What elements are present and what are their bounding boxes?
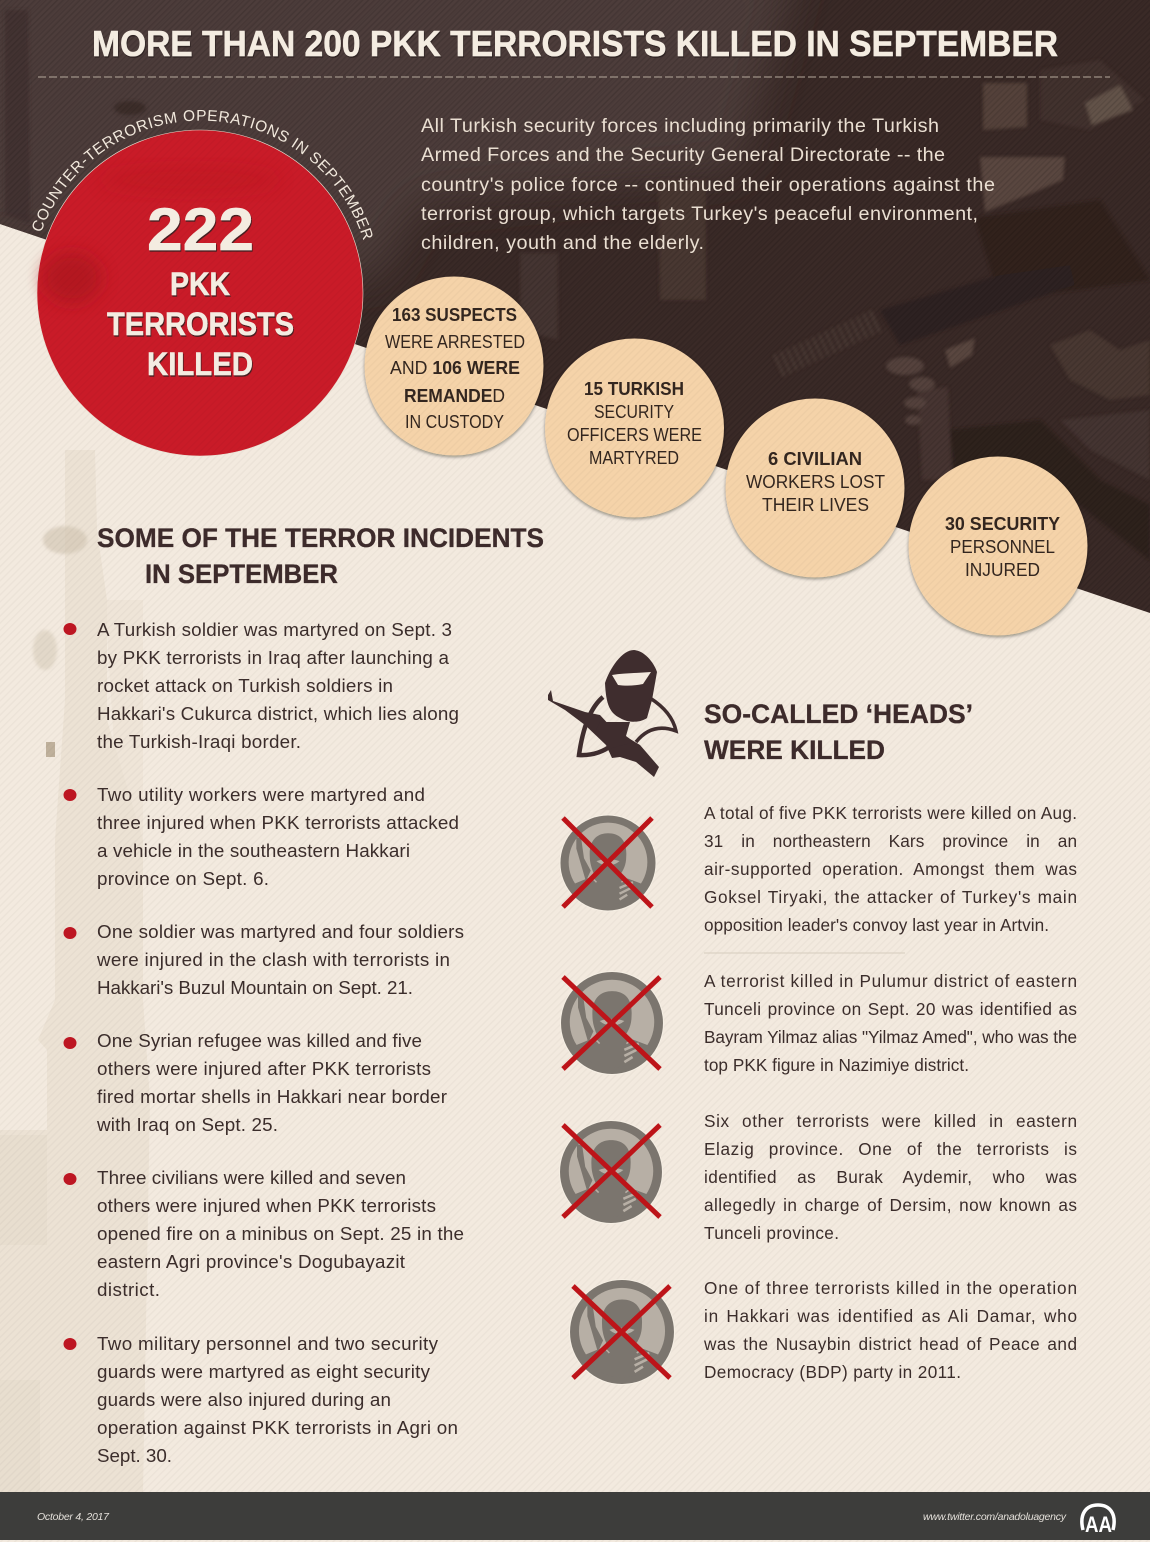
text: second killed head: A terrorist killed in Pulumur district of eastern <box>704 971 1077 991</box>
bubble: civilian workers: 6 CIVILIAN <box>768 449 862 469</box>
intro text block <box>421 115 995 254</box>
text: third killed head: Tunceli province. <box>704 1223 839 1243</box>
incident 1 <box>64 619 459 752</box>
incident 4 <box>64 1030 447 1135</box>
dashed divider <box>38 76 1110 78</box>
incident 5: others were injured when PKK terrorists <box>97 1195 436 1216</box>
text: first killed head: air-supported operation. Amongst them was <box>704 859 1077 879</box>
incident 5 <box>64 1167 464 1300</box>
icon: agency logo <box>1082 1505 1114 1537</box>
incident 5: Three civilians were killed and seven <box>97 1167 406 1188</box>
date: October 4, 2017 <box>37 1511 110 1523</box>
bubble: security personnel injured: INJURED <box>965 560 1040 580</box>
bubble: suspects <box>364 276 544 456</box>
bubble: officers martyred: OFFICERS WERE <box>567 425 702 445</box>
icon: masked militant with rifle <box>548 650 676 777</box>
heading: so-called heads <box>704 699 973 765</box>
bubble: officers martyred: SECURITY <box>594 402 674 422</box>
curved caption around red circle: COUNTER-TERRORISM OPERATIONS IN SEPTEMBER <box>32 110 372 240</box>
bubble: officers martyred: 15 TURKISH <box>584 379 684 399</box>
incident 6: Sept. 30. <box>97 1445 172 1466</box>
text: first killed head: Goksel Tiryaki, the attacker of Turkey's main <box>704 887 1077 907</box>
incident 6 <box>64 1333 458 1466</box>
title: MORE THAN 200 PKK TERRORISTS KILLED IN SEPTEMBER <box>92 23 1058 64</box>
bubble: suspects: AND 106 WERE <box>390 358 520 378</box>
incident 4: with Iraq on Sept. 25. <box>96 1114 278 1135</box>
incident 6: Two military personnel and two security <box>97 1333 439 1354</box>
big number 222: 222 <box>147 196 254 263</box>
text: fourth killed head: was the Nusaybin district head of Peace and <box>703 1334 1077 1354</box>
text: second killed head <box>704 971 1077 1075</box>
incident 4: others were injured after PKK terrorists <box>97 1058 431 1079</box>
text: fourth killed head <box>703 1278 1077 1382</box>
text: fourth killed head: in Hakkari was identified as Ali Damar, who <box>704 1306 1077 1326</box>
intro text block: country's police force -- continued their operations against the <box>421 174 995 196</box>
text: fourth killed head: One of three terrorists killed in the operation <box>704 1278 1077 1298</box>
incident 3 <box>64 921 464 998</box>
incident 3: Hakkari's Buzul Mountain on Sept. 21. <box>97 977 413 998</box>
killed label: PKK <box>170 266 230 302</box>
crossed icon 3 <box>560 1120 662 1224</box>
heading: terror incidents: IN SEPTEMBER <box>145 559 338 589</box>
intro text block: terrorist group, which targets Turkey's peaceful environment, <box>421 203 978 225</box>
intro text block: Armed Forces and the Security General Directorate -- the <box>421 144 945 166</box>
incident 3: were injured in the clash with terrorists in <box>96 949 450 970</box>
source url: www.twitter.com/anadoluagency <box>923 1511 1067 1523</box>
bubble: civilian workers <box>726 398 904 578</box>
heading: so-called heads: SO-CALLED ‘HEADS’ <box>704 699 973 729</box>
incident 6: guards were martyred as eight security <box>97 1361 431 1382</box>
crossed icon 1 <box>560 815 656 911</box>
text: first killed head: A total of five PKK terrorists were killed on Aug. <box>704 803 1077 823</box>
incident 5: district. <box>97 1279 160 1300</box>
heading: terror incidents <box>97 523 544 589</box>
incident 6: guards were also injured during an <box>97 1389 391 1410</box>
text: first killed head: opposition leader's convoy last year in Artvin. <box>704 915 1049 935</box>
dark photo band with soldier <box>0 0 1150 620</box>
incident 1: the Turkish-Iraqi border. <box>97 731 301 752</box>
footer bar <box>0 1492 1150 1540</box>
bubble: suspects: IN CUSTODY <box>405 412 504 432</box>
bubble: security personnel injured: PERSONNEL <box>950 537 1055 557</box>
incident 5: eastern Agri province's Dogubayazit <box>97 1251 406 1272</box>
text: third killed head: allegedly in charge of Dersim, now known as <box>704 1195 1077 1215</box>
text: second killed head: top PKK figure in Nazimiye district. <box>704 1055 969 1075</box>
rifle <box>778 320 878 366</box>
incident 5: opened fire on a minibus on Sept. 25 in the <box>97 1223 464 1244</box>
red circle: 222 killed <box>37 130 363 456</box>
background rifle silhouette <box>0 450 150 1492</box>
incident 2: Two utility workers were martyred and <box>97 784 425 805</box>
heading: terror incidents: SOME OF THE TERROR INCIDENTS <box>97 523 544 553</box>
crossed icon 2 <box>560 972 664 1074</box>
incident 1: by PKK terrorists in Iraq after launching a <box>97 647 450 668</box>
bubble: suspects: WERE ARRESTED <box>385 332 525 352</box>
heading: so-called heads: WERE KILLED <box>704 735 885 765</box>
incident 4: fired mortar shells in Hakkari near border <box>97 1086 447 1107</box>
incident 6: operation against PKK terrorists in Agri on <box>97 1417 458 1438</box>
text: first killed head <box>704 803 1077 935</box>
bubble: security personnel injured: 30 SECURITY <box>945 514 1060 534</box>
icon: agency logo: AA <box>1085 1512 1112 1537</box>
text: third killed head: identified as Burak Aydemir, who was <box>704 1167 1077 1187</box>
incident 2: province on Sept. 6. <box>97 868 269 889</box>
text: third killed head <box>704 1111 1077 1243</box>
bubble: officers martyred <box>545 338 724 518</box>
killed label: KILLED <box>147 346 253 382</box>
text: second killed head: Tunceli province on Sept. 20 was identified as <box>704 999 1077 1019</box>
killed label <box>107 266 294 382</box>
crossed icon 4 <box>570 1280 674 1384</box>
text: second killed head: Bayram Yilmaz alias "Yilmaz Amed", who was the <box>704 1027 1077 1047</box>
incident 4: One Syrian refugee was killed and five <box>97 1030 422 1051</box>
bubble: suspects: 163 SUSPECTS <box>392 305 517 325</box>
text: fourth killed head: Democracy (BDP) party in 2011. <box>704 1362 961 1382</box>
bubble: civilian workers: THEIR LIVES <box>762 495 869 515</box>
incident 2: a vehicle in the southeastern Hakkari <box>97 840 410 861</box>
incident 1: Hakkari's Cukurca district, which lies along <box>97 703 459 724</box>
incident 1: A Turkish soldier was martyred on Sept. 3 <box>97 619 452 640</box>
text: third killed head: Elazig province. One of the terrorists is <box>704 1139 1077 1159</box>
soldier helmet and face <box>983 83 1027 130</box>
intro text block: children, youth and the elderly. <box>421 232 704 254</box>
incident 3: One soldier was martyred and four soldiers <box>97 921 464 942</box>
incident 2: three injured when PKK terrorists attacked <box>97 812 459 833</box>
killed label: TERRORISTS <box>107 306 294 342</box>
text: third killed head: Six other terrorists were killed in eastern <box>704 1111 1077 1131</box>
text: first killed head: 31 in northeastern Kars province in an <box>704 831 1077 851</box>
incident 2 <box>64 784 459 889</box>
bubble: civilian workers: WORKERS LOST <box>746 472 885 492</box>
intro text block: All Turkish security forces including primarily the Turkish <box>421 115 939 137</box>
incident list <box>64 619 464 1466</box>
bubble: security personnel injured <box>908 456 1088 636</box>
incident 1: rocket attack on Turkish soldiers in <box>97 675 393 696</box>
bubble: officers martyred: MARTYRED <box>589 448 679 468</box>
bubble: suspects: REMANDED <box>404 386 505 406</box>
